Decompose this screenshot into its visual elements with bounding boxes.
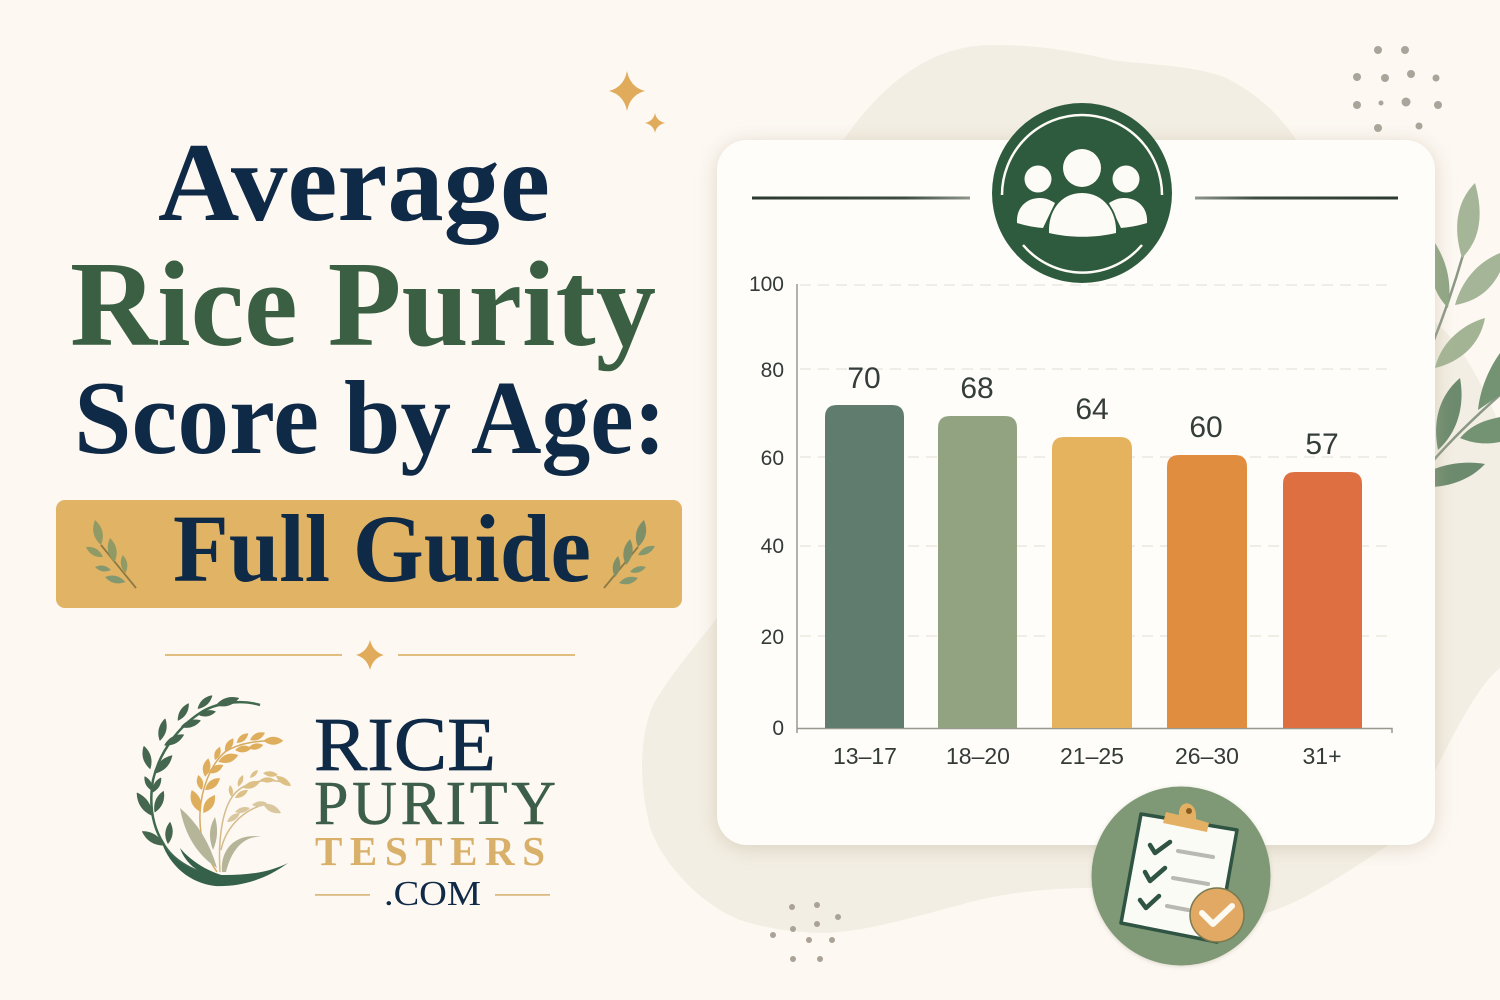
logo wordmark: TESTERS (315, 828, 545, 874)
logo (137, 696, 556, 913)
value labels: 64 (1075, 393, 1109, 426)
title line: Score by Age (74, 359, 666, 476)
y axis labels: 60 (761, 447, 784, 470)
y axis labels: 100 (749, 273, 784, 296)
value labels (847, 362, 1339, 461)
y axis labels: 40 (761, 535, 784, 558)
x axis labels: 13–17 (833, 743, 897, 769)
dots: top right (1353, 46, 1442, 132)
icon: left sprig (86, 520, 136, 588)
y axis labels (749, 273, 784, 740)
value labels: 57 (1305, 428, 1339, 461)
gold grains (191, 732, 283, 813)
header rule: left (752, 196, 970, 200)
title line: Rice Purity: Rice Purity (70, 237, 656, 372)
divider with sparkle (165, 640, 575, 670)
pale grains (229, 770, 291, 798)
logo emblem (137, 696, 291, 886)
icon: people group (992, 103, 1172, 283)
value labels: 68 (960, 372, 994, 405)
title line: Score by Age: Age: (471, 359, 666, 476)
title line: Score by Age: by (344, 359, 451, 476)
x axis labels (833, 743, 1342, 769)
wreath leaves (137, 696, 238, 845)
dots: bottom (770, 902, 841, 962)
axes (797, 284, 1392, 733)
y axis labels: 20 (761, 626, 784, 649)
x axis labels: 21–25 (1060, 743, 1124, 769)
value labels: 70 (847, 362, 881, 395)
header rule: right (1195, 196, 1398, 200)
title line: Score by Age: Score (74, 359, 319, 476)
y axis labels: 80 (761, 359, 784, 382)
sparkles: top (609, 71, 665, 133)
logo wordmark: RICE (314, 703, 496, 787)
title (70, 121, 666, 476)
wreath stem and crescent (151, 702, 260, 877)
logo wordmark (314, 703, 556, 913)
icon: right sprig (604, 520, 655, 588)
foliage: right side sprigs (1429, 183, 1500, 487)
y axis labels: 0 (772, 717, 784, 740)
title line: Average: Average (158, 121, 550, 245)
logo wordmark: .COM (384, 874, 481, 913)
pale leaves (180, 808, 263, 872)
icon: clipboard checklist (1092, 786, 1270, 966)
palest grains (227, 801, 281, 822)
logo wordmark: PURITY (314, 770, 556, 838)
bar chart (749, 273, 1392, 769)
x axis labels: 26–30 (1175, 743, 1239, 769)
banner text: Full Guide (173, 495, 591, 602)
x axis labels: 18–20 (946, 743, 1010, 769)
panel: chart card (717, 103, 1435, 845)
bars (825, 405, 904, 728)
banner: Full Guide (56, 495, 682, 608)
background blob (642, 45, 1500, 933)
value labels: 60 (1189, 411, 1223, 444)
x axis labels: 31+ (1302, 743, 1342, 769)
wheat stems (200, 741, 280, 872)
